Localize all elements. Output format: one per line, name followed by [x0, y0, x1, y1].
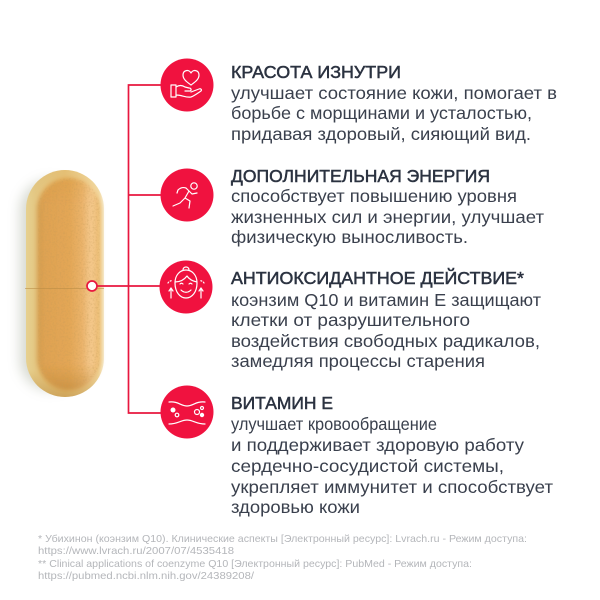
text block: extra energy: жизненных сил и энергии, улучшает: [231, 207, 544, 227]
text block: extra energy: способствует повышению уровня: [231, 186, 517, 206]
text block: vitamin E: сердечно-сосудистой системы,: [231, 456, 504, 476]
icon: smiling face with arrows: [160, 260, 212, 314]
text block: vitamin E: [231, 393, 553, 517]
footnotes: * Убихинон (коэнзим Q10). Клинические аспекты [Электронный ресурс]: Lvrach.ru - Режим доступа:: [38, 533, 527, 545]
text block: beauty from within: улучшает состояние кожи, помогает в: [231, 83, 557, 103]
footnotes: https://www.lvrach.ru/2007/07/4535418: [38, 545, 234, 557]
text block: vitamin E: укрепляет иммунитет и способствует: [231, 477, 553, 497]
text block: antioxidant action: замедляя процессы старения: [231, 351, 485, 371]
icon: hand holding heart: [160, 58, 214, 112]
text block: extra energy: физическую выносливость.: [231, 227, 468, 247]
text block: vitamin E: здоровью кожи: [231, 497, 360, 517]
capsule: [20, 170, 104, 397]
connector lines: [97, 85, 161, 413]
icon: blood vessel with cells: [160, 386, 214, 438]
footnotes: https://pubmed.ncbi.nlm.nih.gov/24389208/: [38, 570, 254, 582]
text block: beauty from within: [231, 62, 557, 144]
icon: running figure: [160, 168, 214, 222]
text block: extra energy: [231, 166, 544, 247]
text block: antioxidant action: коэнзим Q10 и витамин Е защищают: [231, 290, 541, 310]
text block: antioxidant action: [231, 267, 541, 371]
text block: antioxidant action: клетки от разрушительного: [231, 310, 470, 330]
text block: vitamin E: и поддерживает здоровую работу: [231, 435, 524, 455]
text block: antioxidant action: воздействия свободных радикалов,: [231, 331, 540, 351]
text block: vitamin E: улучшает кровообращение: [231, 414, 437, 434]
text block: antioxidant action: АНТИОКСИДАНТНОЕ ДЕЙСТВИЕ*: [231, 267, 524, 288]
text block: beauty from within: КРАСОТА ИЗНУТРИ: [231, 62, 401, 82]
footnotes: ** Clinical applications of coenzyme Q10 [Электронный ресурс]: PubMed - Режим доступа:: [38, 558, 472, 570]
text block: beauty from within: борьбе с морщинами и усталостью,: [231, 103, 532, 123]
text block: vitamin E: ВИТАМИН Е: [231, 393, 333, 413]
capsule marker dot: [87, 281, 97, 291]
text block: extra energy: ДОПОЛНИТЕЛЬНАЯ ЭНЕРГИЯ: [231, 166, 490, 186]
text block: beauty from within: придавая здоровый, сияющий вид.: [231, 124, 531, 144]
footnotes: [38, 533, 527, 582]
